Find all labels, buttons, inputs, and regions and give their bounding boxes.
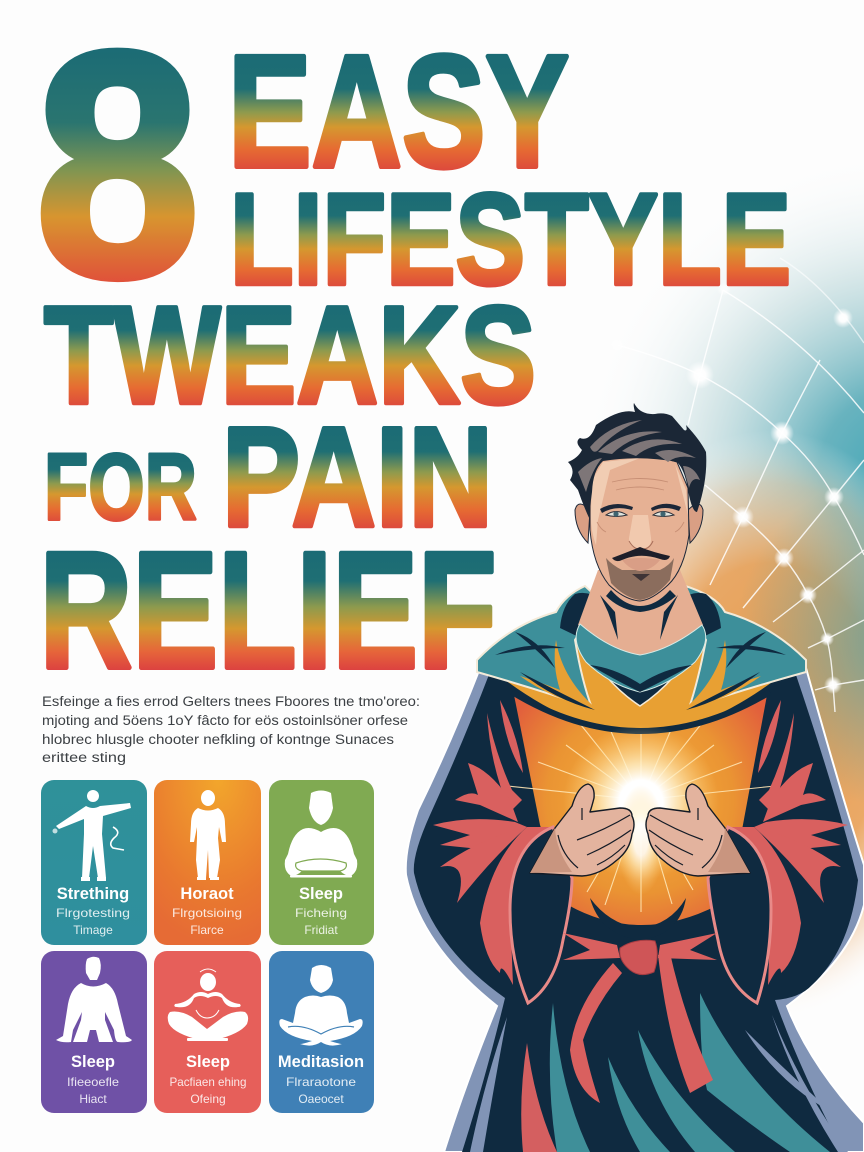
robe: navy body (414, 646, 858, 1152)
icon: meditating figure (279, 965, 363, 1046)
chest arc: dark band below yoke (512, 692, 770, 731)
card: Sleep (coral): Pacfiaen ehing (170, 1075, 246, 1089)
title line: FOR: FOR (44, 434, 197, 540)
card label: Sleep (71, 1053, 115, 1071)
left hand (530, 784, 634, 876)
card: Sleep (green): Fridiat (304, 923, 338, 937)
right wrist shade (708, 828, 750, 873)
hair highlights (578, 420, 700, 492)
card: Sleep (green): Ficheing (295, 906, 347, 920)
right sleeve pink feathers (754, 700, 848, 903)
intro paragraph: Esfeinge a fies errod Gelters tnees Fboores tne tmo'oreo: (42, 694, 420, 709)
ears (575, 504, 703, 543)
icon: seated figure (285, 790, 357, 878)
card label: Sleep (186, 1053, 230, 1071)
mouth (622, 558, 660, 571)
title line: TWEAKS: TWEAKS (44, 278, 536, 433)
network of light nodes (609, 258, 864, 712)
card: Sleep (purple): Hiact (79, 1092, 107, 1106)
card: Sleep (purple): Ifieeoefle (67, 1075, 119, 1089)
intro paragraph: mjoting and 5öens 1oY fâcto for eös ostoinlsöner orfese (42, 713, 408, 728)
title line: RELIEF: RELIEF (40, 518, 496, 704)
cape: right teal (681, 585, 806, 708)
card: Meditation (269, 951, 374, 1113)
jaw shadow (606, 590, 676, 612)
network nodes (609, 282, 853, 694)
cape gold streaks (520, 640, 761, 712)
card label: Strething (57, 885, 129, 903)
face highlight (591, 458, 688, 545)
light rays (507, 718, 775, 912)
goatee (632, 574, 650, 581)
belt tails (570, 963, 622, 1103)
card: Sleep (coral) (154, 951, 261, 1113)
card: Meditation: Oaeocet (298, 1092, 344, 1106)
title (35, 0, 791, 704)
brows (600, 504, 681, 513)
left sleeve cuff (510, 827, 572, 1003)
scarf V: navy (573, 625, 708, 706)
belt knot (620, 940, 657, 975)
intro paragraph: erittee sting (42, 750, 126, 765)
card: Sleep (purple) (41, 951, 147, 1113)
forehead wrinkles (597, 478, 684, 532)
icon: standing figure (190, 790, 226, 880)
card: Horaot: Flrgotsioing (172, 906, 242, 920)
belly crescent (590, 898, 686, 940)
card label: Horaot (180, 885, 234, 903)
card: Stretching: Flrgotesting (56, 906, 130, 920)
robe: outer slate edge (406, 634, 864, 1152)
chest panel (514, 695, 767, 925)
card label: Sleep (299, 885, 343, 903)
mustache (612, 547, 670, 561)
intro paragraph (42, 694, 420, 765)
cape dark folds (495, 632, 786, 710)
hair (568, 403, 706, 520)
card: Sleep (coral): Ofeing (190, 1092, 226, 1106)
right hand creases (649, 808, 722, 868)
belt (563, 933, 717, 960)
card: Meditation: Flraraotone (286, 1075, 356, 1089)
card label: Meditasion (278, 1053, 364, 1071)
collar folds (590, 665, 692, 692)
nose shadow (629, 541, 653, 549)
icon: cross-legged figure (168, 969, 248, 1041)
card: Sleep (green) (269, 780, 374, 945)
card: Stretching (41, 780, 147, 945)
right hand (646, 784, 750, 876)
man in robe (406, 403, 864, 1152)
beard (606, 558, 674, 600)
neck (578, 570, 703, 655)
title line: PAIN: PAIN (222, 398, 493, 557)
left wrist shade (530, 828, 572, 873)
left sleeve sash (480, 827, 553, 985)
right sleeve cuff (708, 827, 771, 1003)
face (590, 455, 689, 601)
teal collar (576, 624, 706, 692)
neck shadow (600, 595, 678, 640)
skirt stripes (470, 993, 848, 1152)
title line: EASY: EASY (228, 22, 569, 200)
central glow (563, 724, 719, 895)
left sleeve pink feathers (433, 700, 527, 903)
right sleeve sash (728, 827, 801, 985)
eyes (606, 511, 674, 517)
nose (629, 515, 651, 549)
hood inner navy (560, 593, 721, 640)
card: Stretching: Timage (73, 923, 113, 937)
intro paragraph: hlobrec hlusgle chooter nefkling of kontnge Sunaces (42, 732, 394, 747)
icon: kneeling figure (56, 957, 132, 1042)
left hand creases (558, 808, 631, 868)
scarf yoke: gold (505, 640, 775, 733)
card: Horaot (154, 780, 261, 945)
icon: figure stretching (52, 790, 131, 881)
card: Horaot: Flarce (190, 923, 224, 937)
cape: left teal (477, 586, 600, 708)
